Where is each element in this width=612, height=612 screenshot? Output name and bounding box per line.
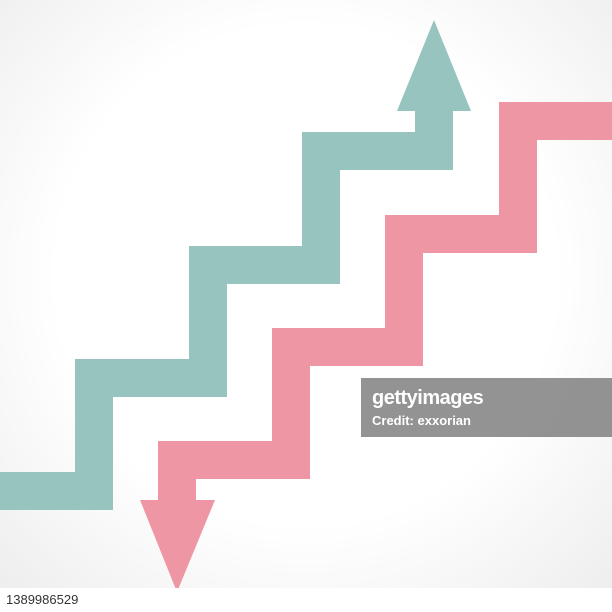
image id strip (0, 588, 612, 612)
image id strip: 1389986529 (6, 592, 78, 607)
pink falling arrow (140, 121, 612, 592)
watermark box (361, 378, 612, 437)
watermark box: Credit: exxorian (372, 413, 471, 428)
watermark box: gettyimages (372, 387, 483, 409)
teal rising arrow (0, 20, 471, 491)
